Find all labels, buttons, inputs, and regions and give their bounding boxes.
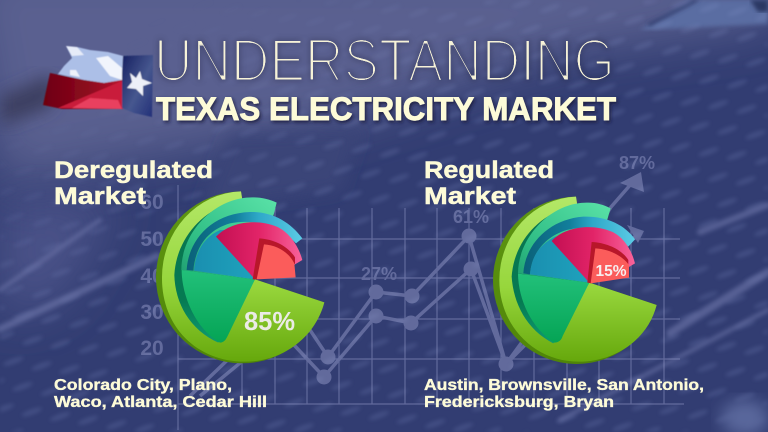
flag red stripe	[43, 73, 123, 109]
chart nodes	[316, 172, 644, 384]
cities: regulated	[424, 377, 704, 411]
cities: deregulated: Waco, Atlanta, Cedar Hill	[54, 394, 267, 411]
flag white stripe	[58, 46, 127, 83]
chart grid	[178, 185, 684, 430]
chart labels: 27%	[361, 264, 397, 284]
value: 85%: 85%	[244, 308, 295, 336]
title line one: UNDERSTANDING	[154, 27, 615, 94]
heading: regulated market: Regulated	[424, 157, 554, 184]
pie chart: 15 percent	[493, 197, 657, 364]
cities: regulated: Austin, Brownsville, San Antonio,	[424, 377, 704, 394]
cities: deregulated	[54, 377, 267, 411]
pie chart: 85 percent	[156, 191, 324, 363]
chart line one	[190, 176, 638, 396]
chart labels: 60	[140, 191, 164, 214]
heading: deregulated market	[54, 157, 213, 210]
flag star	[127, 71, 152, 96]
chart labels	[140, 153, 655, 360]
heading: deregulated market: Market	[54, 183, 146, 210]
heading: regulated market: Market	[424, 183, 516, 210]
chart labels: 30	[140, 301, 164, 324]
flag of Texas	[43, 46, 153, 117]
cities: regulated: Fredericksburg, Bryan	[424, 394, 614, 411]
panel: regulated market	[424, 157, 704, 411]
chart labels: 40	[140, 265, 164, 288]
heading: regulated market	[424, 157, 554, 210]
heading: deregulated market: Deregulated	[54, 157, 213, 184]
chart line two	[200, 232, 640, 396]
cities: deregulated: Colorado City, Plano,	[54, 377, 232, 394]
chart labels: 50	[140, 228, 164, 251]
background line chart	[140, 153, 684, 430]
chart labels: 20	[140, 337, 164, 360]
value: 15%: 15%	[595, 263, 627, 280]
title line two: TEXAS ELECTRICITY MARKET	[156, 91, 616, 127]
chart labels: 61%	[453, 207, 489, 227]
chart labels: 87%	[619, 153, 655, 173]
flag blue field	[122, 55, 153, 117]
panel: deregulated market	[54, 157, 324, 411]
